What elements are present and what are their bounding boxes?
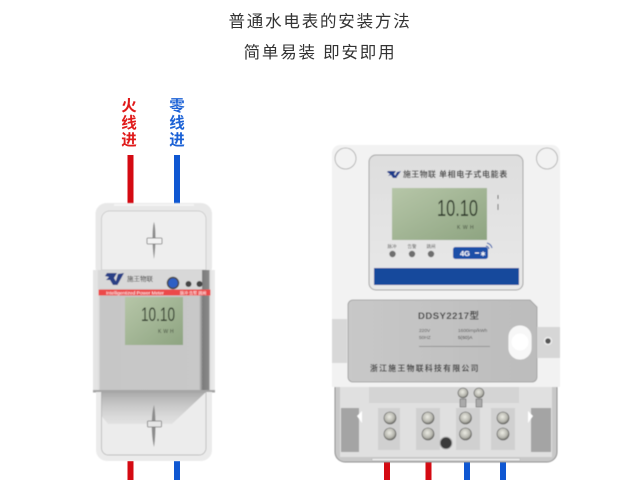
- display panel: 跳闸: [426, 243, 436, 250]
- meter body: 10.10: [141, 305, 175, 326]
- status knob: [168, 278, 178, 288]
- wires: din-rail meter: [128, 155, 180, 480]
- mounting holes: [335, 148, 558, 169]
- red product strip: [98, 290, 210, 296]
- label: live wire in: 火: [121, 98, 137, 115]
- logo: [387, 171, 401, 178]
- indicator labels: 脉冲: [388, 243, 397, 250]
- company: 浙江施王物联科技有限公司: [370, 363, 480, 373]
- title line one: 普通水电表的安装方法: [228, 12, 412, 31]
- label: neutral wire in: 零: [169, 97, 185, 115]
- label: live wire in: [121, 98, 137, 149]
- brand name: 施王物联: [127, 274, 154, 283]
- side marks: [498, 195, 499, 199]
- title line two: 简单易装 即安即用: [244, 43, 396, 62]
- label: neutral wire in: [169, 97, 185, 149]
- top cover: [96, 203, 212, 278]
- display panel: [369, 155, 523, 290]
- display panel: 10.10: [437, 195, 478, 221]
- meter body: Intelligentized Power Meter: [106, 290, 164, 296]
- 4G badge: ∗: [480, 251, 486, 258]
- panel heading: 施王物联: [403, 169, 436, 179]
- display panel: 告警: [408, 243, 417, 250]
- indicator lights: [389, 251, 396, 257]
- label: live wire in: 线: [121, 113, 137, 132]
- specs: 220V: [419, 328, 431, 334]
- nameplate: [332, 300, 537, 382]
- meter body: KWH: [158, 329, 176, 335]
- din-rail meter: [93, 203, 215, 461]
- lcd: [125, 297, 183, 345]
- nameplate: 1600imp/kWh: [458, 328, 488, 334]
- brand logo: [105, 273, 124, 285]
- 4G badge: [453, 243, 492, 259]
- meter body: 脉冲 告警 跳闸: [180, 290, 206, 296]
- label: neutral wire in: 进: [169, 131, 185, 149]
- display panel: KWH: [457, 225, 476, 231]
- label: neutral wire in: 线: [169, 113, 185, 132]
- display panel: 单相电子式电能表: [439, 169, 508, 179]
- seal tab: [508, 325, 560, 360]
- 4G badge: 4G: [460, 249, 470, 258]
- single-phase wall meter: [332, 145, 560, 462]
- nameplate: 50HZ: [419, 335, 431, 341]
- terminal screws: [384, 388, 509, 440]
- label: live wire in: 进: [121, 131, 137, 149]
- centre hole: [440, 437, 452, 449]
- blue band: [374, 268, 519, 285]
- title: [228, 12, 412, 62]
- model: DDSY2217型: [418, 310, 480, 322]
- nameplate: 5(60)A: [458, 335, 473, 341]
- wires: wall meter: [384, 462, 506, 480]
- meter body: [93, 270, 215, 392]
- lcd: [392, 188, 487, 240]
- lower cover: [96, 392, 212, 461]
- terminal block: [335, 386, 557, 462]
- meter base: [332, 145, 560, 387]
